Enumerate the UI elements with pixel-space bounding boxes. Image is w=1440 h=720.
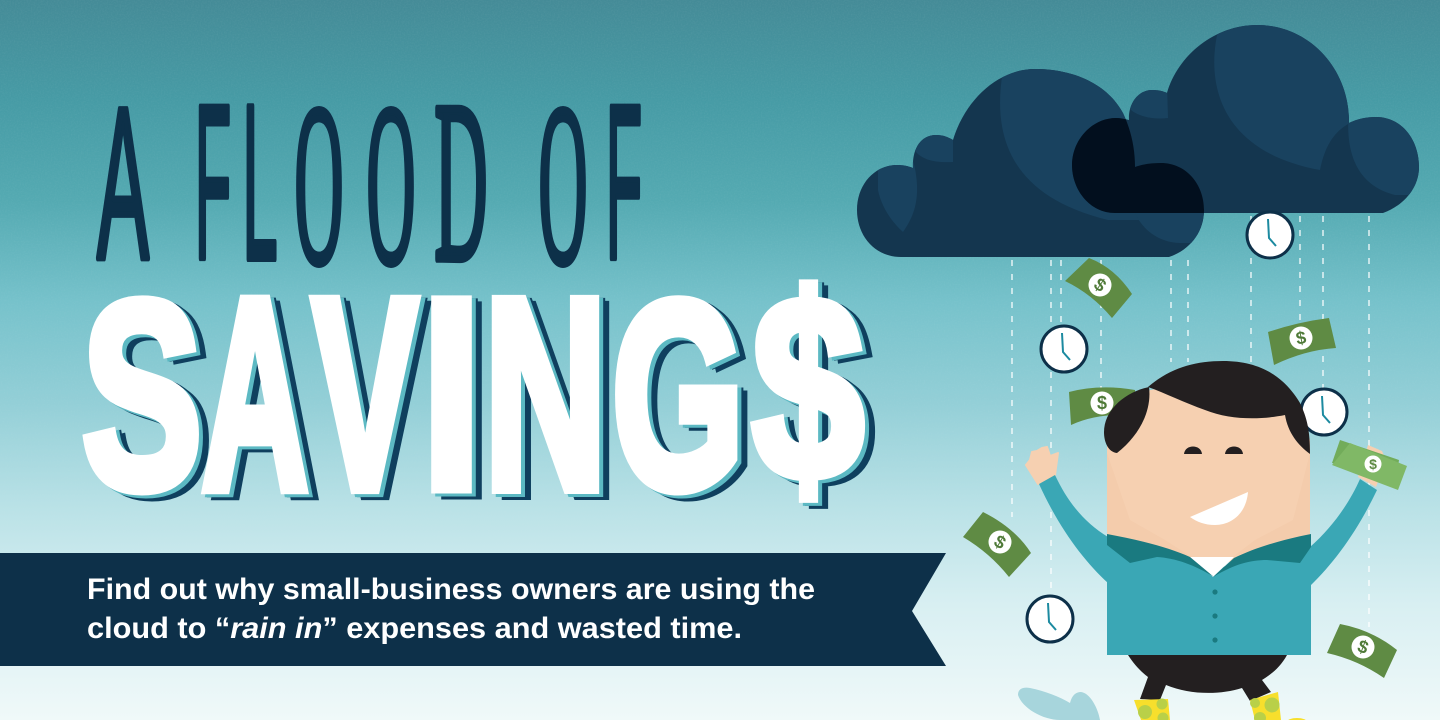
sky grain texture	[4, 0, 1438, 162]
clock 3	[1301, 389, 1347, 435]
character	[1018, 361, 1407, 720]
bill: top centre	[1065, 258, 1132, 318]
title: A FLOOD OF	[97, 54, 642, 312]
right arm	[1310, 479, 1377, 586]
title: A FLOOD OF: L	[242, 58, 278, 307]
cheek shading left	[1107, 453, 1190, 556]
title: A FLOOD OF: F	[606, 60, 642, 306]
bills in hand	[1332, 440, 1407, 490]
bills in hand: $	[1369, 456, 1377, 472]
left boot	[1134, 698, 1170, 720]
white undershirt	[1190, 557, 1234, 577]
title: SAVING$: V	[312, 243, 418, 547]
left cloud	[850, 60, 1210, 260]
shirt body	[1107, 540, 1311, 655]
title: A FLOOD OF: F	[195, 60, 231, 306]
title: SAVING$: A	[202, 243, 308, 546]
bill: right: $	[1294, 327, 1308, 349]
bill: behind head	[1069, 387, 1135, 425]
collar right	[1213, 534, 1311, 577]
eye left	[1184, 446, 1202, 454]
bill: right	[1268, 318, 1336, 365]
subtitle ribbon	[0, 553, 946, 666]
title: SAVING$	[82, 243, 864, 547]
cloud overlap	[1072, 118, 1204, 213]
title: A FLOOD OF: D	[434, 54, 488, 309]
left hand	[1026, 447, 1058, 484]
title: SAVING$: $	[752, 244, 864, 534]
head	[1107, 380, 1310, 562]
title: A FLOOD OF: O	[294, 57, 344, 312]
bill: lower right: $	[1355, 636, 1371, 658]
right cloud	[1126, 25, 1419, 213]
hair top	[1148, 361, 1310, 454]
rain dashes	[1012, 216, 1369, 627]
cheek shading right	[1234, 453, 1310, 556]
bill: lower left	[963, 512, 1031, 577]
ribbon shape	[0, 553, 946, 666]
ribbon text line 1: Find out why small-business owners are using the	[87, 573, 815, 606]
title: A FLOOD OF: O	[366, 57, 416, 312]
bill: lower left: $	[991, 531, 1009, 553]
clock 1	[1247, 212, 1293, 258]
collar left	[1107, 534, 1214, 577]
clouds	[850, 20, 1425, 260]
bill: lower right	[1327, 624, 1397, 678]
right hand	[1358, 445, 1386, 487]
title: SAVING$: I	[421, 243, 482, 546]
legs and trousers	[1128, 655, 1287, 701]
clock 2	[1041, 326, 1087, 372]
bill: top centre: $	[1090, 274, 1110, 296]
bill: behind head: $	[1097, 393, 1107, 413]
eye right	[1225, 446, 1243, 454]
water splash	[1018, 688, 1100, 720]
clock 4	[1027, 596, 1073, 642]
title: SAVING$: N	[484, 243, 607, 547]
shirt buttons	[1212, 589, 1218, 643]
hair left lobe	[1104, 387, 1149, 453]
title: SAVING$: G	[612, 247, 744, 544]
right boot	[1250, 692, 1281, 720]
title: SAVING$: S	[82, 247, 202, 544]
smile	[1190, 492, 1248, 525]
left arm	[1039, 475, 1108, 583]
title: A FLOOD OF: A	[97, 64, 149, 305]
title: A FLOOD OF: O	[538, 57, 588, 312]
ribbon text line 2: cloud to “rain in” expenses and wasted time.	[87, 612, 742, 645]
boot toe	[1287, 718, 1307, 720]
